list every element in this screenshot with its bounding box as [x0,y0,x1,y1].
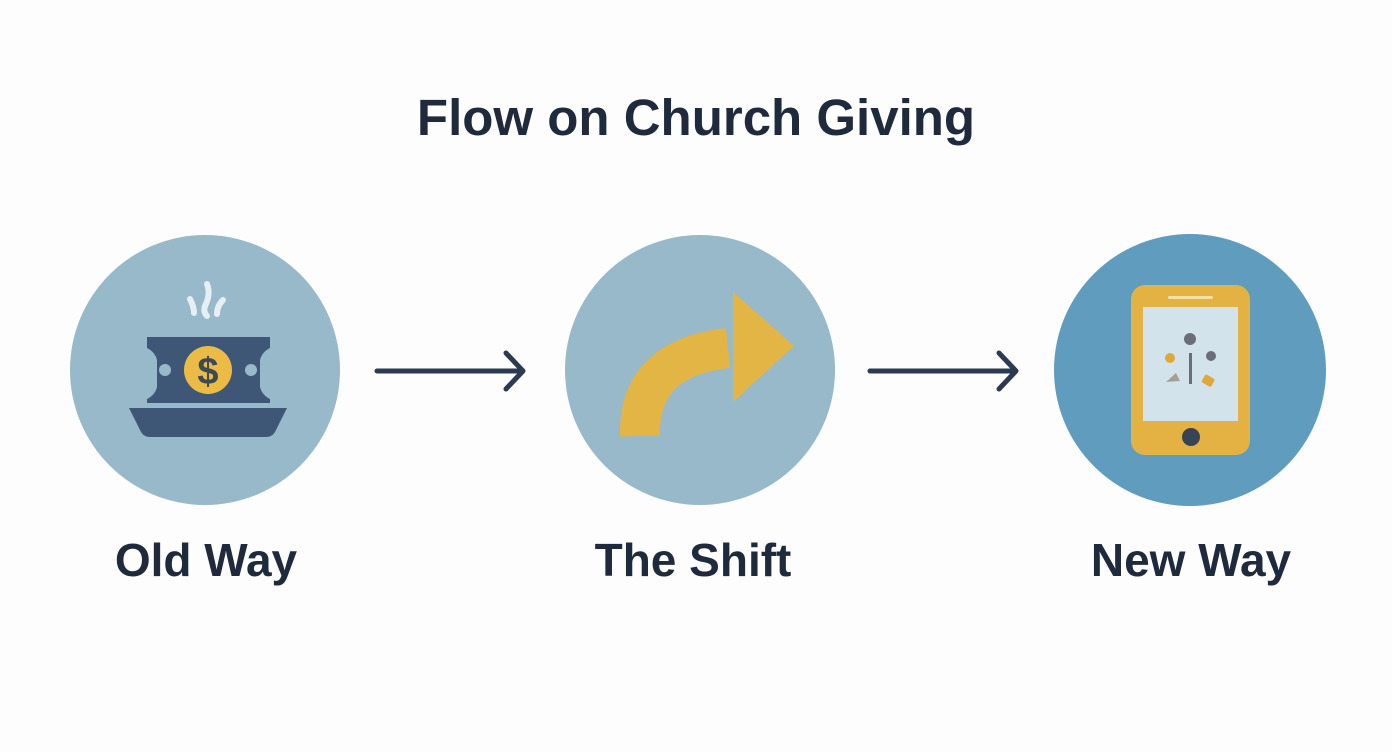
label: new way: New Way [1091,534,1291,586]
icon: phone [1131,285,1250,455]
arrow 1 [377,353,523,389]
icon: curved arrow [640,292,794,436]
title: Flow on Church Giving [417,89,975,146]
label: the shift: The Shift [595,534,791,586]
icon: steam [190,284,223,316]
arrow 2 [870,353,1016,389]
icon: bill and coin [147,337,270,403]
panel: the shift circle [565,235,835,505]
icon: plate [129,408,287,437]
label: old way: Old Way [115,534,297,586]
panel: new way circle [1054,234,1326,506]
icon: bill and coin: $ [197,351,219,393]
panel: old way circle [70,235,340,505]
